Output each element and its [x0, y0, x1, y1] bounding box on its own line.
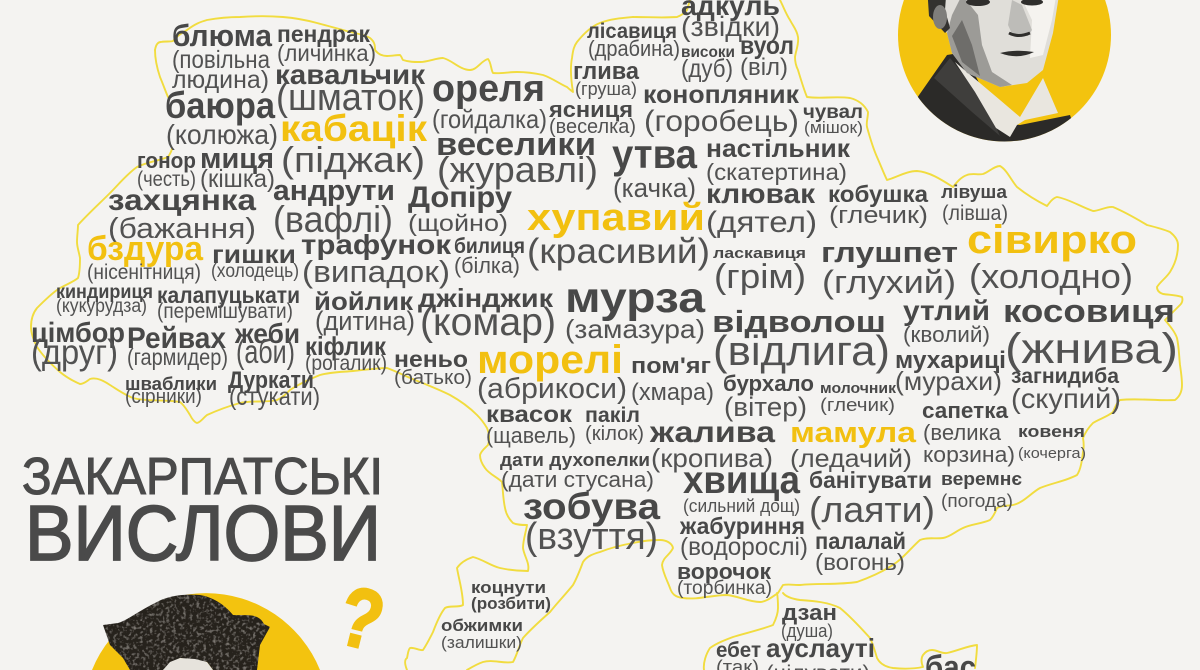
word: Допіру: [408, 181, 512, 236]
word: жабуриння: [679, 513, 808, 561]
word: хвища: (сильний дощ): [683, 496, 800, 516]
word: йойлик: [314, 288, 415, 336]
word: кобушка: кобушка: [828, 181, 928, 207]
word: миця: [200, 143, 275, 193]
hair and ear: [926, 0, 950, 33]
word: джінджик: джінджик: [418, 283, 554, 313]
word: настільник: [706, 135, 851, 185]
word: кабацік: (піджак): [281, 139, 425, 180]
word: хвища: хвища: [683, 459, 800, 502]
word: утва: утва: [612, 131, 698, 177]
word: глива: [573, 58, 640, 99]
word: захцянка: [108, 184, 256, 245]
word: бздура: (нісенітниця): [87, 261, 201, 284]
word: лівуша: [941, 182, 1008, 225]
word: дзан: дзан: [782, 600, 837, 625]
word: банітувати: (лаяти): [809, 489, 935, 530]
word: ласкавиця: [713, 245, 806, 296]
word: киндириця: киндириця: [56, 282, 153, 303]
word: відволош: відволош: [712, 304, 886, 339]
word: сівирко: (холодно): [969, 258, 1133, 296]
word: баюра: [165, 85, 278, 150]
word: сапетка: корзина): [923, 442, 1015, 467]
word: вуол: [740, 32, 794, 81]
mouth: [1000, 51, 1034, 56]
word: настільник: (скатертина): [706, 159, 847, 185]
word: дати духопелки: дати духопелки: [500, 450, 650, 470]
word: загнидиба: (скупий): [1011, 383, 1121, 414]
word: йойлик: (дитина): [315, 306, 415, 336]
word: билиця: билиця: [454, 235, 525, 258]
word: ворочок: (торбинка): [677, 578, 772, 599]
eyes: [966, 0, 990, 6]
word: квасок: квасок: [486, 401, 573, 427]
word: ворочок: ворочок: [677, 559, 772, 584]
word: Дуркати: (стукати): [229, 383, 320, 411]
word: жеби: [234, 318, 300, 370]
word: коцнути: коцнути: [471, 578, 546, 597]
word: ореля: (гойдалка): [432, 104, 547, 134]
word: глушпет: [821, 237, 958, 300]
word: пом'яг: [631, 353, 714, 406]
word: пендрак: пендрак: [277, 21, 370, 47]
face: [928, 0, 1063, 87]
word: сівирко: сівирко: [967, 218, 1137, 262]
word: хупавий: (красивий): [527, 232, 710, 271]
word: ковеня: (кочерга): [1018, 445, 1086, 462]
word: загнидиба: загнидиба: [1011, 365, 1119, 388]
word: мухариці: (мурахи): [895, 366, 1002, 396]
word: киндириця: [56, 282, 153, 317]
word: кавальчик: кавальчик: [275, 59, 426, 90]
word: пендрак: (личинка): [277, 40, 376, 66]
word: клювак: [706, 178, 817, 239]
word: обжимки: (залишки): [441, 633, 522, 652]
word: гонор: гонор: [137, 148, 196, 173]
word: косовиця: косовиця: [1003, 293, 1175, 329]
word: Допіру: Допіру: [408, 181, 512, 214]
word: лісавиця: лісавиця: [587, 20, 677, 43]
word: конопляник: конопляник: [643, 81, 800, 109]
word: жалива: жалива: [649, 416, 775, 449]
word: жеби: жеби: [234, 318, 300, 349]
word: глушпет: (глухий): [822, 264, 956, 300]
word: ясниця: ясниця: [548, 97, 633, 122]
word: конопляник: (горобець): [644, 105, 799, 138]
word: морелі: [477, 338, 627, 405]
word: трафунок: (випадок): [302, 254, 450, 289]
word: дзан: [781, 600, 837, 641]
word: чувал: чувал: [803, 102, 863, 123]
word: бурхало: [723, 371, 814, 422]
word: веремнє: веремнє: [941, 469, 1022, 489]
word: морелі: (абрикоси): [477, 373, 627, 405]
word: баюра: (колюжа): [166, 119, 278, 150]
word: зобува: (взуття): [525, 516, 658, 558]
word: мурза: мурза: [565, 274, 706, 322]
word: билиця: [454, 235, 525, 278]
word: морелі: морелі: [477, 338, 623, 382]
word: жабуриння: жабуриння: [679, 513, 805, 539]
word: трафунок: [301, 229, 452, 289]
word: лісавиця: (драбина): [588, 36, 680, 61]
word: ясниця: [548, 97, 636, 138]
word: хупавий: хупавий: [527, 197, 705, 239]
word: йойлик: йойлик: [314, 288, 414, 316]
word: ясниця: (веселка): [549, 116, 636, 138]
word: неньо: неньо: [394, 346, 468, 372]
word: квасок: (щавель): [486, 423, 576, 448]
word: цімбор: цімбор: [31, 317, 125, 348]
word: сапетка: сапетка: [922, 398, 1009, 423]
word: хупавий: [527, 197, 710, 271]
word: палалай: (вогонь): [815, 549, 905, 575]
word: кабацік: [280, 108, 428, 180]
word: сапетка: (велика: [923, 420, 1002, 445]
word: вуол: (віл): [740, 54, 788, 81]
word: ласкавиця: ласкавиця: [713, 245, 806, 262]
word: андрути: андрути: [273, 175, 395, 207]
word: кобушка: [828, 181, 928, 229]
word: миця: миця: [200, 143, 274, 175]
title: ВИСЛОВИ: [25, 489, 381, 577]
word: Рейвах: Рейвах: [127, 322, 226, 355]
word: пом'яг: пом'яг: [631, 353, 711, 378]
fur hat: [103, 595, 270, 670]
word: блюма: людина): [172, 66, 269, 94]
word: цімбор: (друг): [31, 333, 118, 372]
word: ласкавиця: (грім): [714, 258, 806, 296]
word: гишки: гишки: [212, 239, 296, 269]
word: палалай: [815, 528, 906, 575]
word: клювак: клювак: [706, 178, 816, 209]
word: утлий: (кволий): [903, 322, 990, 347]
word: мухариці: мухариці: [895, 347, 1006, 374]
word: утва: (качка): [613, 173, 696, 203]
word: косовиця: [1003, 293, 1178, 373]
word: глива: глива: [573, 58, 640, 85]
word: мамула: мамула: [790, 417, 917, 449]
word: пакіл: (кілок): [585, 423, 644, 445]
word: кіфлик: [305, 331, 387, 375]
word: ореля: [432, 68, 547, 134]
word: мурза: [565, 274, 706, 344]
portrait: top right engraving in yellow circle: [898, 0, 1111, 142]
word: бурхало: (вітер): [724, 392, 807, 422]
word: коцнути: (розбити): [471, 594, 551, 613]
word: блюма: (повільна: [172, 46, 270, 74]
word: киндириця: (кукурудза): [56, 296, 147, 317]
word: бурхало: бурхало: [723, 371, 814, 396]
coat: [918, 54, 1071, 142]
word: пакіл: [585, 404, 644, 445]
word: жалива: [649, 416, 775, 473]
word: зобува: зобува: [523, 486, 660, 527]
word: мамула: [790, 417, 917, 473]
word: калапуцькати: (перемішувати): [157, 300, 293, 323]
word: пом'яг: (хмара): [631, 379, 714, 406]
word: пакіл: пакіл: [585, 404, 640, 427]
word: гонор: (честь): [137, 168, 196, 191]
word: шваблики: шваблики: [125, 374, 217, 394]
word: мухариці: [895, 347, 1006, 396]
word: калапуцькати: [157, 282, 300, 323]
word: банітувати: банітувати: [809, 467, 932, 493]
word: клювак: (дятел): [706, 206, 817, 239]
word: молочник: молочник: [820, 380, 897, 397]
word: утлий: утлий: [903, 295, 990, 326]
word: баюра: баюра: [165, 85, 275, 126]
word: коцнути: [471, 578, 551, 613]
word: ореля: ореля: [432, 68, 545, 110]
word: бздура: бздура: [87, 230, 204, 268]
word: адкуль: (звідки): [681, 11, 780, 42]
word: чувал: (мішок): [804, 118, 863, 137]
word: конопляник: [643, 81, 800, 138]
word: жабуриння: (водорослі): [680, 533, 808, 561]
word: настільник: настільник: [706, 135, 851, 163]
nose: [1008, 0, 1032, 36]
word: Допіру: (щойно): [408, 210, 508, 236]
word: кіфлик: (рогалик): [305, 352, 387, 375]
word: кіфлик: кіфлик: [305, 331, 387, 361]
word: утлий: [903, 295, 990, 347]
word: неньо: [394, 346, 472, 389]
word: мамула: (ледачий): [790, 445, 912, 473]
word: кобушка: (глечик): [829, 202, 928, 229]
question mark: ?: [330, 568, 393, 669]
word: сапетка: [922, 398, 1015, 467]
word: кабацік: кабацік: [280, 108, 428, 149]
word: дати духопелки: [500, 450, 654, 492]
word: утва: [612, 131, 698, 203]
word: зобува: [523, 486, 660, 558]
word: глива: (груша): [575, 79, 637, 99]
word: мурза: (замазура): [565, 314, 705, 344]
word: веремнє: (погода): [941, 491, 1013, 511]
word: лісавиця: [587, 20, 680, 61]
word: ворочок: [677, 559, 772, 599]
word: блюма: блюма: [172, 18, 273, 53]
word: дати духопелки: (дати стусана): [501, 467, 654, 492]
title: ЗАКАРПАТСЬКІ: [22, 448, 383, 506]
portrait: bottom left man in fur hat in yellow circle: [92, 593, 320, 670]
word: захцянка: захцянка: [108, 184, 256, 217]
word: джінджик: [418, 283, 556, 344]
word: билиця: (білка): [454, 253, 520, 278]
word: банітувати: [809, 467, 935, 530]
word: веселики: веселики: [436, 126, 596, 162]
word: загнидиба: [1011, 365, 1121, 414]
word: ебет: ебет: [716, 639, 761, 662]
face: [163, 658, 213, 670]
word: миця: (кішка): [200, 165, 275, 193]
word: джінджик: (комар): [420, 301, 556, 344]
word: Рейвах: [127, 322, 228, 370]
word: гишки: (холодець): [211, 261, 299, 282]
word: високи: [681, 44, 735, 83]
word: ковеня: [1018, 422, 1086, 462]
word: трафунок: трафунок: [301, 229, 452, 260]
word: косовиця: (жнива): [1005, 325, 1178, 373]
word: захцянка: (бажання): [108, 213, 256, 245]
word: глушпет: глушпет: [821, 237, 958, 269]
word: гонор: [137, 148, 196, 191]
word: високи: високи: [681, 44, 735, 61]
word: чувал: [803, 102, 863, 137]
word: кавальчик: [275, 59, 426, 119]
word: високи: (дуб): [681, 55, 733, 83]
word: андрути: (вафлі): [273, 199, 393, 240]
word: Дуркати: [228, 367, 320, 411]
word: жалива: (кропива): [651, 443, 773, 473]
word: калапуцькати: калапуцькати: [157, 282, 300, 308]
word: гишки: [211, 239, 299, 282]
word: Рейвах: (гармидер): [127, 344, 228, 370]
word: вуол: вуол: [740, 32, 794, 60]
word: веселики: (журавлі): [437, 149, 598, 190]
word: палалай: палалай: [815, 528, 906, 554]
word: жеби: (аби): [236, 333, 295, 370]
word: шваблики: [125, 374, 217, 408]
word: ковеня: ковеня: [1018, 422, 1085, 441]
word: дзан: (душа): [781, 621, 833, 641]
word: відволош: (відлига): [713, 327, 890, 374]
word: квасок: [486, 401, 576, 448]
word: веселики: [436, 126, 598, 190]
word: обжимки: обжимки: [441, 616, 523, 635]
word: аус лауті: ауслауті: [766, 633, 875, 663]
word: молочник: [820, 380, 897, 415]
word: шваблики: (сірники): [125, 386, 202, 408]
word: андрути: [273, 175, 395, 240]
word: кавальчик: (шматок): [276, 77, 425, 119]
word: веремнє: [941, 469, 1022, 511]
word: лівуша: лівуша: [941, 182, 1008, 202]
word: блюма: [172, 18, 273, 94]
word: неньо: (батько): [394, 367, 472, 389]
word: Дуркати: Дуркати: [228, 367, 314, 394]
word: пендрак: [277, 21, 376, 66]
word: обжимки: [441, 616, 523, 652]
shirt collar: [955, 62, 1058, 137]
word: лівуша: (лівша): [942, 202, 1008, 225]
word: молочник: (глечик): [820, 395, 895, 415]
title: [22, 448, 383, 577]
word: відволош: [712, 304, 890, 374]
word: сівирко: [967, 218, 1137, 296]
